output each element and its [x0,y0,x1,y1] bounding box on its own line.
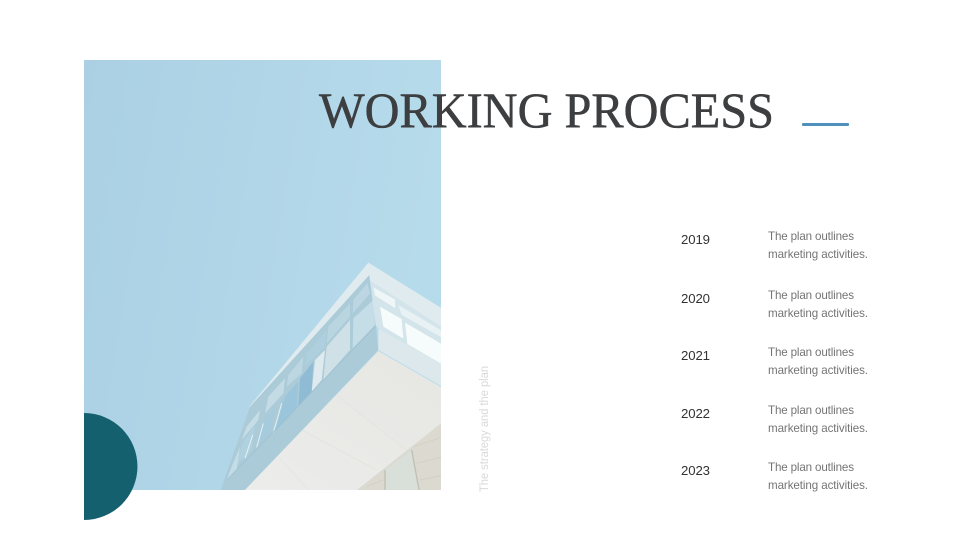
ground-level window [386,451,418,490]
vertical caption: The strategy and the plan [479,366,491,492]
soffit [243,351,443,492]
entry 2019 [681,230,868,261]
entry 2022: 2022 [681,406,710,421]
entry 2021 [681,346,868,377]
entry 2019: The plan outlines [768,230,854,243]
entry 2021: marketing activities. [768,364,868,377]
entry 2022 [681,404,868,435]
brick wall [358,424,441,490]
glass facade base [220,275,378,492]
entry 2021: 2021 [681,348,710,363]
building, drawn in zoomed coordinates [220,263,443,492]
lower side band [378,328,443,387]
entry 2022: marketing activities. [768,422,868,435]
entry 2023: The plan outlines [768,461,854,474]
entry 2022: The plan outlines [768,404,854,417]
entry 2023 [681,461,868,492]
photo: modern building against a blue sky [84,60,443,492]
decorative teal half circle [84,413,137,520]
entry 2023: marketing activities. [768,479,868,492]
soffit panel seams [278,395,408,492]
entry 2020: 2020 [681,291,710,306]
title: WORKING PROCESS [319,82,774,138]
entry 2021: The plan outlines [768,346,854,359]
timeline list [681,230,868,492]
accent line [802,123,849,126]
side wall of windows [370,281,441,359]
facade window panes [227,283,376,480]
roof edge strip [249,263,443,409]
entry 2020 [681,289,868,320]
entry 2019: marketing activities. [768,248,868,261]
sky background [84,60,441,490]
brick courses [367,437,443,487]
entry 2023: 2023 [681,463,710,478]
side window panes [373,287,443,365]
entry 2020: marketing activities. [768,307,868,320]
entry 2019: 2019 [681,232,710,247]
entry 2020: The plan outlines [768,289,854,302]
